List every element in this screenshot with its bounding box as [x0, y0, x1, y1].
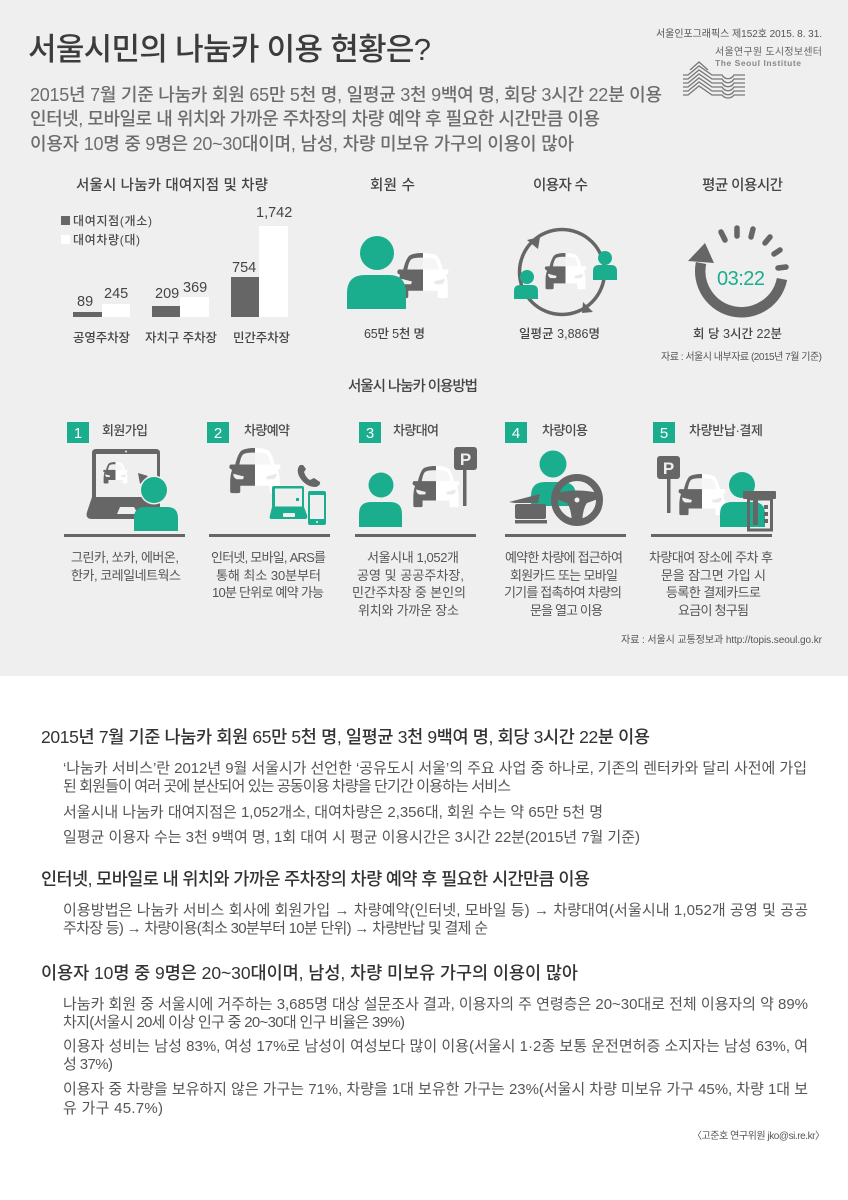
- section 1 text: 2015년 7월 기준 나눔카 회원 65만 5천 명, 일평균 3천 9백여 명, 회당 3시간 22분 이용: [41, 727, 650, 747]
- step 3: rental: 3: [366, 425, 374, 442]
- legend: [61, 214, 152, 247]
- section 3 text: 나눔카 회원 중 서울시에 거주하는 3,685명 대상 설문조사 결과, 이용자의 주 연령층은 20~30대로 전체 이용자의 약 89%: [63, 996, 808, 1013]
- section 1 text: 된 회원들이 여러 곳에 분산되어 있는 공동이용 차량을 단기간 이용하는 서비스: [63, 778, 511, 795]
- step 4: vehicle use: 회원카드 또는 모바일: [510, 568, 618, 583]
- icon: parking sign, car, person and card reader: P: [663, 459, 674, 478]
- section 3 text: 성 37%): [63, 1056, 113, 1073]
- section 2 text: 이용방법은 나눔카 서비스 회사에 회원가입 → 차량예약(인터넷, 모바일 등) → 차량대여(서울시내 1,052개 공영 및 공공: [63, 902, 808, 919]
- step 5: return and payment: 차량반납·결제: [689, 423, 763, 438]
- heading: users: 이용자 수: [533, 177, 588, 194]
- bar chart: rental points and vehicles: 1,742: [256, 205, 292, 221]
- icon: clock with arrow: [688, 228, 786, 312]
- label: average time: 회 당 3시간 22분: [693, 327, 782, 341]
- step 5: return and payment: [649, 422, 776, 618]
- panel: grey infographic background: [0, 0, 848, 676]
- icon: laptop and person: [87, 449, 178, 531]
- icon: driver and steering wheel: [509, 450, 600, 524]
- step 3: rental: 서울시내 1,052개: [367, 550, 459, 565]
- source: TOPIS: 자료 : 서울시 교통정보과 http://topis.seoul.go.kr: [621, 634, 823, 646]
- step 4: vehicle use: 4: [512, 425, 520, 442]
- heading: members: 회원 수: [370, 177, 415, 194]
- step 1: join: 한카, 코레일네트웍스: [71, 568, 181, 583]
- bar chart: rental points and vehicles: 369: [183, 280, 207, 296]
- heading: how to use: 서울시 나눔카 이용방법: [348, 378, 478, 395]
- icon: users circulating around car: [514, 230, 617, 314]
- title: 서울시민의 나눔카 이용 현황은?: [28, 32, 431, 67]
- step 5: return and payment: 5: [660, 425, 668, 442]
- icon: car and devices: [229, 448, 326, 525]
- section 3 text: 이용자 중 차량을 보유하지 않은 가구는 71%, 차량을 1대 보유한 가구는 23%(서울시 차량 미보유 가구 45%, 차량 1대 보: [63, 1081, 808, 1098]
- step 3: rental: [352, 422, 477, 618]
- step 3: rental: 민간주차장 중 본인의: [352, 585, 466, 600]
- icon: person, car and parking sign: [359, 447, 477, 527]
- step 5: return and payment: 차량대여 장소에 주차 후: [649, 550, 773, 565]
- step 5: return and payment: 요금이 청구됨: [678, 603, 749, 618]
- step 4: vehicle use: [504, 422, 626, 618]
- step 4: vehicle use: 차량이용: [542, 423, 588, 438]
- step 1: join: [64, 422, 185, 583]
- summary text: 인터넷, 모바일로 내 위치와 가까운 주차장의 차량 예약 후 필요한 시간만큼 이용: [30, 109, 600, 129]
- section 3 text: [41, 963, 808, 1117]
- heading: rental points and vehicles: 서울시 나눔카 대여지점 및 차량: [76, 177, 268, 194]
- step 3: rental: 차량대여: [393, 423, 439, 438]
- summary text: 2015년 7월 기준 나눔카 회원 65만 5천 명, 일평균 3천 9백여 명, 회당 3시간 22분 이용: [30, 85, 662, 105]
- step 4: vehicle use: 기기를 접촉하여 차량의: [504, 585, 622, 600]
- step 1: join: 그린카, 쏘카, 에버온,: [71, 550, 179, 565]
- step 3: rental: 위치와 가까운 장소: [358, 603, 459, 618]
- step 2: reservation: 차량예약: [244, 423, 290, 438]
- section 2 text: 주차장 등) → 차량이용(최소 30분부터 10분 단위) → 차량반납 및 결제 순: [63, 920, 488, 937]
- bar chart: rental points and vehicles: 공영주차장: [73, 331, 130, 345]
- section 1 text: ‘나눔카 서비스’란 2012년 9월 서울시가 선언한 ‘공유도시 서울’의 주요 사업 중 하나로, 기존의 렌터카와 달리 사전에 가입: [63, 760, 807, 777]
- icon: clock with arrow: 03:22: [717, 268, 765, 290]
- publication info: The Seoul Institute: [715, 58, 801, 68]
- step 2: reservation: 2: [214, 425, 222, 442]
- source: city data: 자료 : 서울시 내부자료 (2015년 7월 기준): [661, 351, 822, 363]
- section 1 text: [41, 727, 807, 846]
- icon: person, car and parking sign: P: [460, 450, 471, 469]
- step 4: vehicle use: 문을 열고 이용: [530, 603, 603, 618]
- step 2: reservation: [207, 422, 330, 600]
- step 5: return and payment: 문을 잠그면 가입 시: [661, 568, 766, 583]
- bar chart: rental points and vehicles: 민간주차장: [233, 331, 290, 345]
- section 3 text: 이용자 성비는 남성 83%, 여성 17%로 남성이 여성보다 많이 이용(서울시 1·2종 보통 운전면허증 소지자는 남성 63%, 여: [63, 1038, 808, 1055]
- section 3 text: 유 가구 45.7%): [63, 1100, 163, 1117]
- publication info: 서울연구원 도시정보센터: [715, 46, 822, 58]
- icon: parking sign, car, person and card reader: [657, 456, 776, 530]
- bar chart: rental points and vehicles: 754: [232, 260, 256, 276]
- step 1: join: 1: [74, 425, 82, 442]
- label: users: 일평균 3,886명: [519, 327, 600, 341]
- publication info: [656, 28, 822, 68]
- step 5: return and payment: 등록한 결제카드로: [666, 585, 761, 600]
- author credit: 〈고준호 연구위원 jko@si.re.kr〉: [692, 1129, 825, 1142]
- summary text: 이용자 10명 중 9명은 20~30대이며, 남성, 차량 미보유 가구의 이용이 많아: [30, 134, 574, 154]
- bar chart: rental points and vehicles: [61, 205, 292, 345]
- step 4: vehicle use: 예약한 차량에 접근하여: [505, 550, 623, 565]
- step 1: join: 회원가입: [102, 423, 148, 438]
- section 1 text: 서울시내 나눔카 대여지점은 1,052개소, 대여차량은 2,356대, 회원 수는 약 65만 5천 명: [63, 804, 603, 821]
- step 2: reservation: 10분 단위로 예약 가능: [212, 585, 324, 600]
- section 2 text: [41, 869, 808, 937]
- publication info: 서울인포그래픽스 제152호 2015. 8. 31.: [656, 28, 822, 40]
- label: members: 65만 5천 명: [364, 326, 425, 341]
- section 3 text: 이용자 10명 중 9명은 20~30대이며, 남성, 차량 미보유 가구의 이용이 많아: [41, 963, 578, 983]
- section 1 text: 일평균 이용자 수는 3천 9백여 명, 1회 대여 시 평균 이용시간은 3시간 22분(2015년 7월 기준): [63, 829, 640, 846]
- step 2: reservation: 통해 최소 30분부터: [216, 568, 321, 583]
- section 2 text: 인터넷, 모바일로 내 위치와 가까운 주차장의 차량 예약 후 필요한 시간만큼 이용: [41, 869, 590, 889]
- summary text: [30, 85, 662, 154]
- bar chart: rental points and vehicles: 245: [104, 286, 128, 302]
- heading: average time: 평균 이용시간: [702, 177, 783, 194]
- legend: 대여차량(대): [73, 232, 140, 247]
- icon: Seoul Institute logo: [683, 62, 745, 98]
- legend: 대여지점(개소): [73, 214, 152, 228]
- section 3 text: 차지(서울시 20세 이상 인구 중 20~30대 인구 비율은 39%): [63, 1014, 405, 1031]
- bar chart: rental points and vehicles: 209: [155, 286, 179, 302]
- bar chart: rental points and vehicles: 89: [77, 294, 93, 310]
- step 3: rental: 공영 및 공공주차장,: [357, 568, 464, 583]
- icon: member with car: [347, 236, 449, 309]
- bar chart: rental points and vehicles: 자치구 주차장: [145, 331, 217, 345]
- step 2: reservation: 인터넷, 모바일, ARS를: [211, 550, 326, 565]
